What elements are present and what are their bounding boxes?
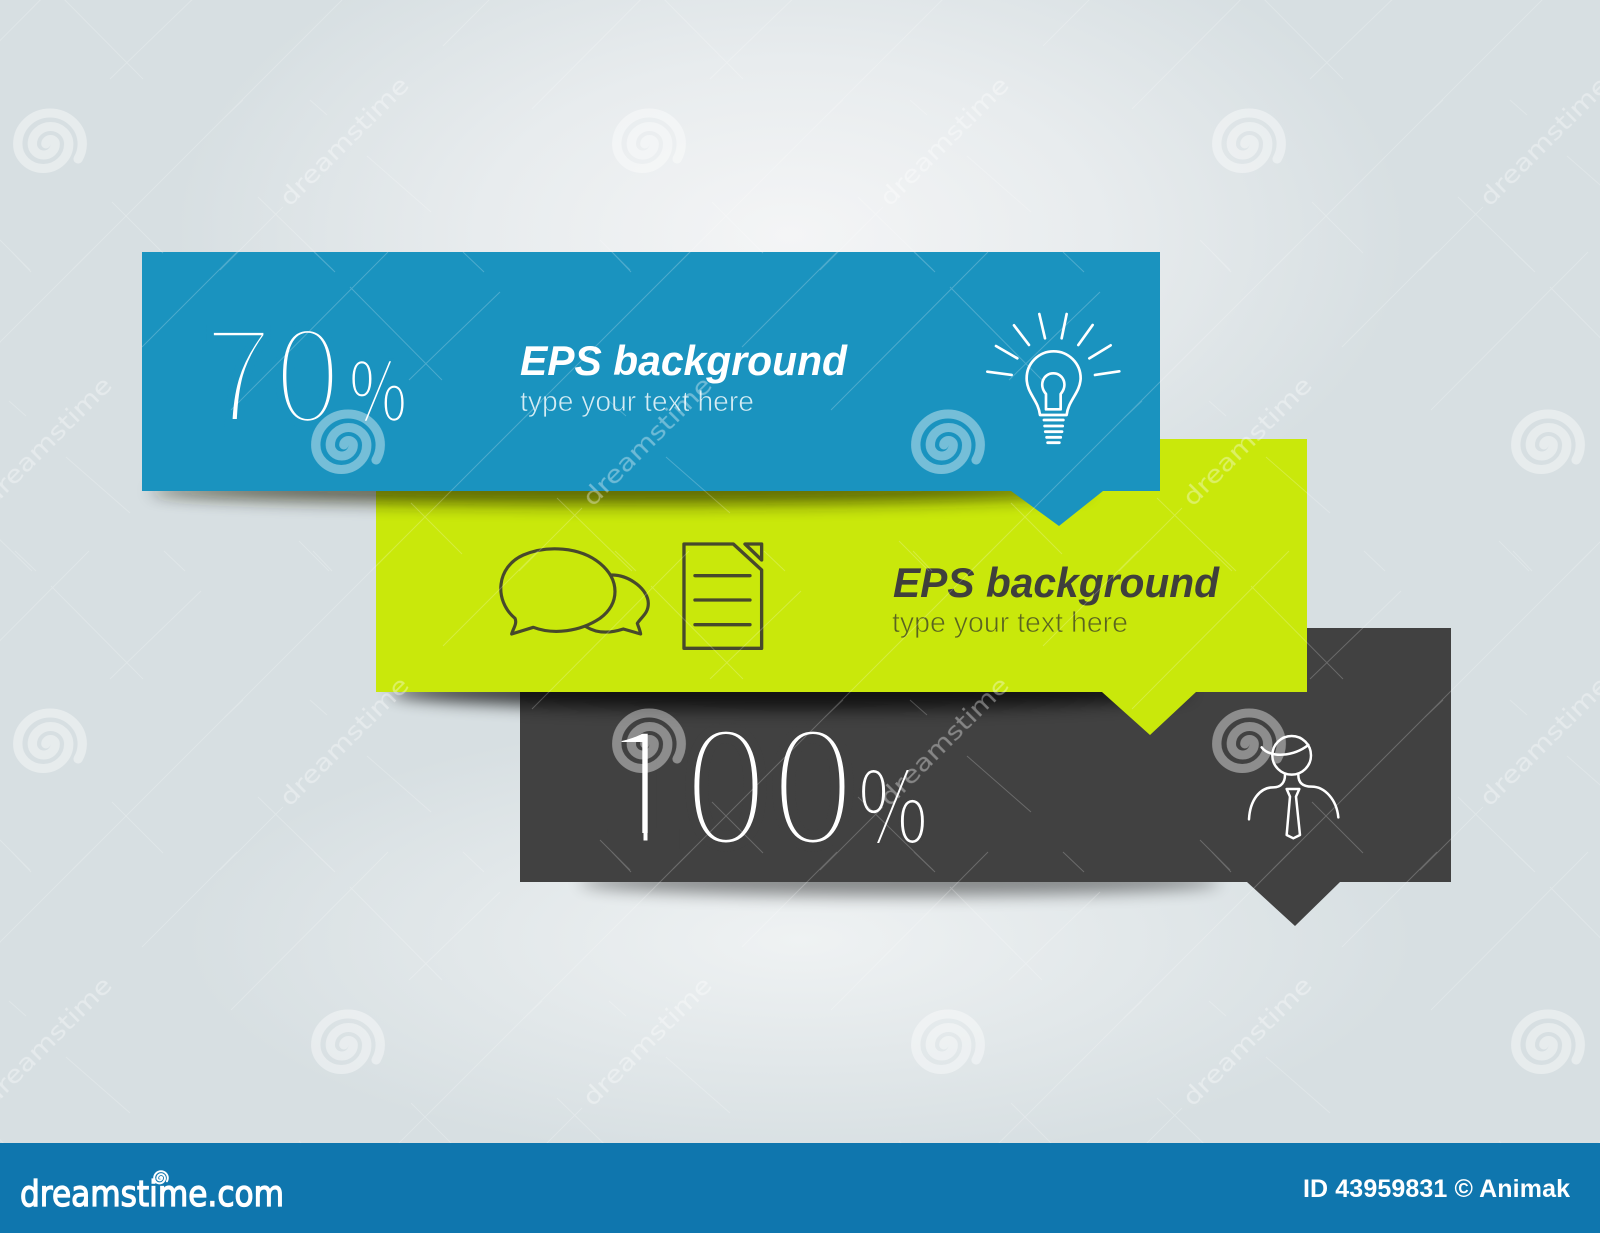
stat: 100%: 100 [598,662,857,891]
shadow of blue panel [150,477,1090,505]
panel: dark 100% banner [520,628,1451,926]
footer logo: dreamstime.com: dreamstime.com [20,1174,284,1215]
watermark: dreamstime text: dreamstime [1177,371,1318,512]
subtext: type your text here: type your text here [892,607,1128,639]
icon: businessman [1249,736,1338,838]
panel: blue banner [142,252,1160,526]
blue panel shape [142,252,1160,526]
icon: document [684,544,762,648]
stat: 70%: 70 [204,271,342,462]
icon: light bulb [987,314,1119,443]
green panel shape [376,439,1307,735]
footer logo spiral [154,1171,168,1183]
stat: 100%: % [858,727,928,872]
dark panel shape [520,628,1451,926]
watermark: dreamstime text: dreamstime [577,371,718,512]
watermark: dreamstime text: dreamstime [874,71,1015,212]
watermark: dreamstime text: dreamstime [874,671,1015,812]
watermark: spirals [18,113,1580,1070]
footer banner [0,1143,1600,1233]
watermark: dreamstime text: dreamstime [1474,71,1600,212]
heading: EPS background: EPS background [893,559,1220,606]
watermark: dreamstime text: dreamstime [577,971,718,1112]
shadow under green panel [390,674,1190,710]
footer image id and author: ID 43959831 © Animak [1303,1175,1570,1203]
watermark: dreamstime text: dreamstime [1474,671,1600,812]
shadow under dark panel [580,868,1220,896]
stat: 70%: % [349,326,407,445]
watermark: dreamstime text: dreamstime [1177,971,1318,1112]
subtext: type your text here: type your text here [520,386,754,418]
icon: speech bubbles [501,549,648,634]
heading: EPS background: EPS background [520,337,848,384]
panel: green banner [376,439,1307,735]
watermark: dreamstime text: dreamstime [274,671,415,812]
watermark: dreamstime text: dreamstime [274,71,415,212]
